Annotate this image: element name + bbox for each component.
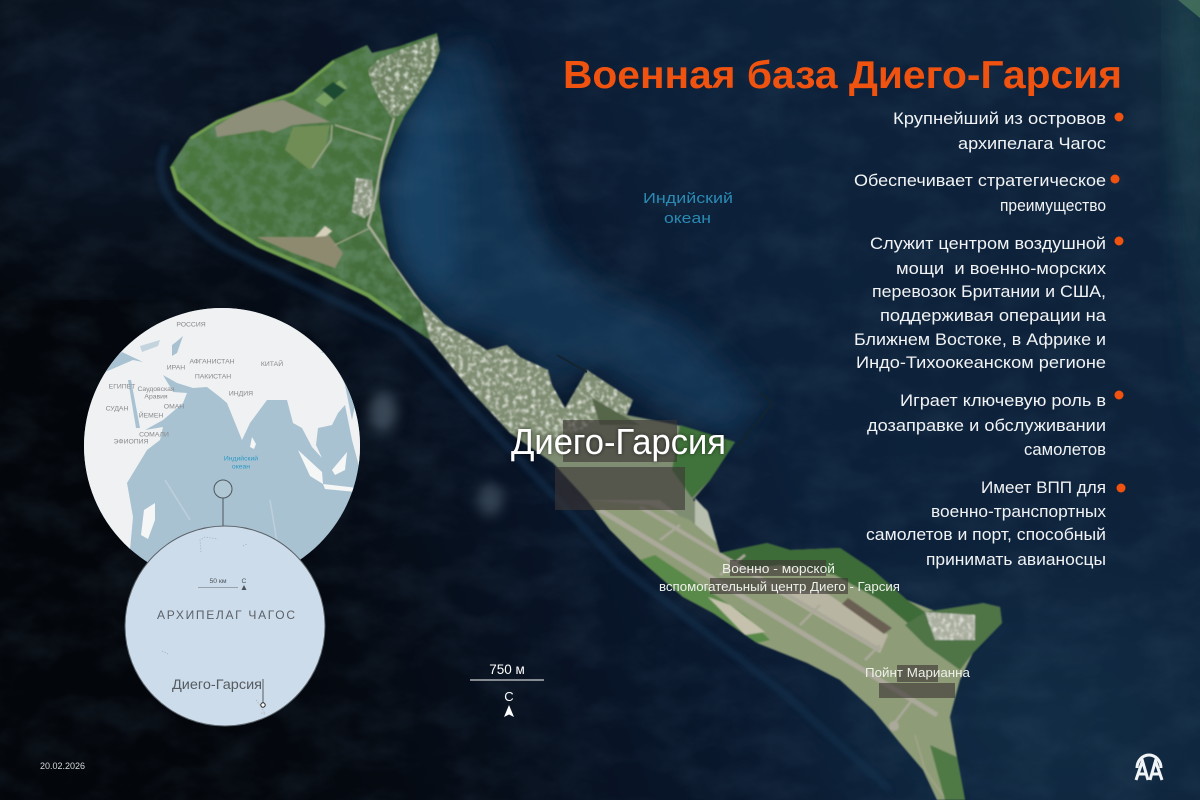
- scale bar: 750 m: С: [504, 689, 514, 704]
- bullet 4: Играет ключевую роль в: [900, 391, 1106, 410]
- globe country labels: ИНДИЯ: [229, 390, 253, 398]
- bullet 3: мощи и военно-морских: [896, 259, 1107, 278]
- globe country labels: ИРАН: [167, 364, 185, 372]
- inset label: Diego Garcia: Диего-Гарсия: [172, 676, 262, 692]
- bullet 5: самолетов и порт, способный: [866, 525, 1106, 544]
- date: 20.02.2026: [40, 761, 85, 771]
- globe country labels: [106, 322, 283, 470]
- globe country labels: Аравия: [144, 394, 168, 400]
- globe seas: [106, 352, 143, 372]
- inset heading: АРХИПЕЛАГ ЧАГОС: [157, 608, 295, 622]
- bullet list: key facts: [854, 109, 1126, 569]
- globe country labels: РОССИЯ: [176, 322, 206, 328]
- callout boxes behind labels: [555, 420, 955, 698]
- globe country labels: ЙЕМЕН: [139, 410, 163, 420]
- bullet 1: Крупнейший из островов: [893, 109, 1106, 128]
- bullet 1: [893, 109, 1124, 153]
- globe country labels: ЭФИОПИЯ: [114, 438, 149, 446]
- globe country labels: ЕГИПЕТ: [109, 384, 135, 390]
- globe country labels: ПАКИСТАН: [195, 374, 231, 380]
- bullet 3: [854, 234, 1124, 372]
- locator globe: [84, 308, 360, 584]
- scale bar: 750 m: [470, 662, 544, 717]
- label: naval support facility: Военно - морской: [722, 562, 835, 576]
- bullet 5: Имеет ВПП для: [981, 478, 1106, 497]
- bullet 4: дозаправке и обслуживании: [867, 416, 1106, 435]
- label: Indian Ocean: Индийский: [643, 191, 733, 207]
- bullet 5: принимать авианосцы: [926, 550, 1106, 569]
- inset scale bar: [198, 578, 247, 590]
- bullet 5: [866, 478, 1126, 569]
- scale bar: 750 m: 750 м: [489, 662, 525, 677]
- island: airfield and south-east section: [587, 500, 1002, 800]
- icon: Anadolu Agency logo: [1136, 755, 1162, 780]
- label: Indian Ocean: океан: [664, 211, 711, 227]
- globe country labels: АФГАНИСТАН: [189, 358, 235, 366]
- bullet 2: Обеспечивает стратегическое: [854, 171, 1106, 190]
- label: naval support facility: [659, 562, 900, 594]
- globe country labels: Индийский: [224, 454, 258, 462]
- bullet 3: перевозок Британии и США,: [872, 282, 1106, 301]
- lagoon shallows: [380, 40, 760, 440]
- locator ring and connector: [214, 480, 232, 526]
- inset location marker: [261, 679, 265, 707]
- inset islands: [162, 537, 265, 714]
- globe country labels: Саудовская: [137, 386, 175, 393]
- inset scale bar: С: [242, 578, 247, 585]
- inset map: Chagos archipelago: [125, 526, 325, 726]
- bullet 4: [867, 390, 1124, 459]
- title: Военная база Диего-Гарсия: [563, 54, 1122, 97]
- bullet 4: самолетов: [1024, 440, 1106, 459]
- bullet 3: Индо-Тихоокеанском регионе: [856, 353, 1106, 372]
- label: Indian Ocean: [643, 191, 733, 227]
- inset scale bar: 50 км: [209, 578, 227, 585]
- bullet 1: архипелага Чагос: [958, 134, 1107, 153]
- globe country labels: ОМАН: [164, 404, 184, 410]
- reef shelf along the south-west shore: [160, 145, 890, 790]
- island: central base area: [420, 300, 735, 543]
- globe country labels: СОМАЛИ: [139, 432, 169, 438]
- label: naval support facility: вспомогательный центр Диего - Гарсия: [659, 580, 900, 594]
- label: Diego Garcia main: Диего-Гарсия: [511, 421, 726, 462]
- label: Point Marianne: Пойнт Марианна: [865, 666, 970, 680]
- map: Diego Garcia island: [165, 30, 1002, 800]
- globe country labels: СУДАН: [106, 406, 128, 412]
- bullet 3: поддерживая операции на: [880, 306, 1107, 325]
- bullet 3: Служит центром воздушной: [870, 234, 1106, 253]
- bullet 3: Ближнем Востоке, в Африке и: [854, 330, 1106, 349]
- globe country labels: КИТАЙ: [261, 359, 283, 368]
- bullet 2: [854, 171, 1120, 215]
- globe land masses: [84, 308, 360, 550]
- island: north forest section: [165, 30, 450, 342]
- globe country labels: океан: [232, 464, 250, 470]
- bullet 5: военно-транспортных: [931, 502, 1107, 521]
- bullet 2: преимущество: [1000, 196, 1106, 215]
